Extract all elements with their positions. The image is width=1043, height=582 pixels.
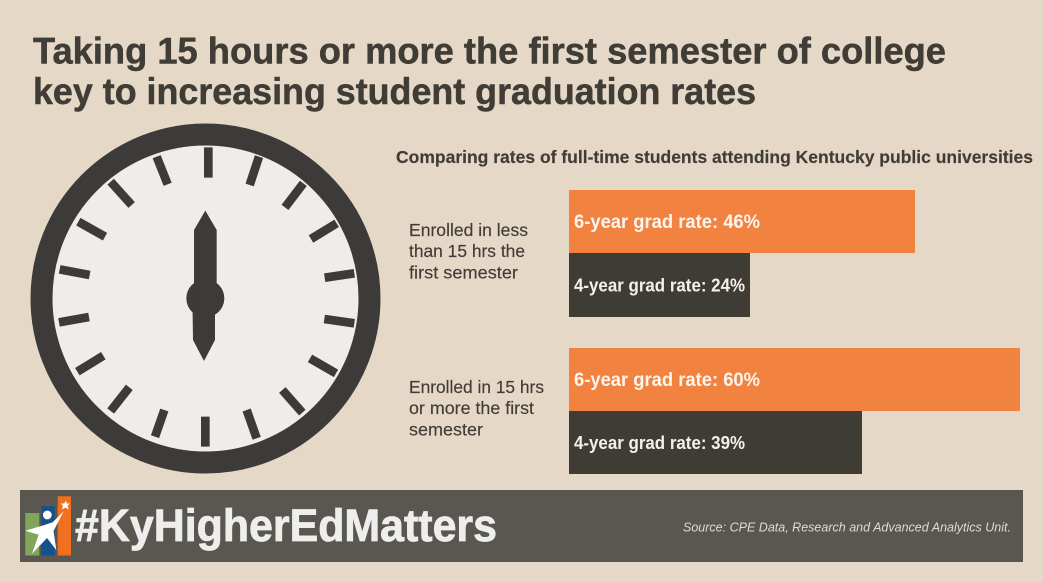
bar: 6-year rate 60%: 6-year grad rate: 60% <box>574 369 760 391</box>
icon: logo <box>25 496 71 556</box>
title <box>33 30 946 112</box>
label: less than 15 hours group: than 15 hrs the <box>409 241 525 261</box>
bar: 6-year rate 46% <box>569 190 915 253</box>
hashtag: #KyHigherEdMatters <box>75 500 497 551</box>
clock tick marks <box>59 147 354 447</box>
label: less than 15 hours group: first semester <box>409 262 518 282</box>
bar: 4-year rate 39%: 4-year grad rate: 39% <box>574 433 745 453</box>
label: less than 15 hours group <box>409 220 528 282</box>
clock hands <box>186 211 224 361</box>
title: key to increasing student graduation rates <box>33 71 756 112</box>
label: 15 hours or more group: Enrolled in 15 hrs <box>409 377 544 397</box>
bar chart: 15 hours or more <box>569 348 1020 474</box>
title: Taking 15 hours or more the first semester of college <box>33 30 946 72</box>
label: less than 15 hours group: Enrolled in less <box>409 220 528 240</box>
label: 15 hours or more group: or more the first <box>409 398 534 418</box>
label: 15 hours or more group: semester <box>409 420 483 440</box>
bar: 6-year rate 60% <box>569 348 1020 411</box>
bar chart: less than 15 hours <box>569 190 915 317</box>
label: 15 hours or more group <box>409 377 544 440</box>
icon: clock <box>42 134 370 462</box>
chart subtitle: Comparing rates of full-time students attending Kentucky public universities <box>396 147 1033 167</box>
bar: 4-year rate 24% <box>569 253 750 317</box>
source note: Source: CPE Data, Research and Advanced Analytics Unit. <box>683 520 1011 534</box>
bar: 4-year rate 39% <box>569 411 862 474</box>
bar: 4-year rate 24%: 4-year grad rate: 24% <box>574 276 745 296</box>
footer band <box>20 490 1023 562</box>
bar: 6-year rate 46%: 6-year grad rate: 46% <box>574 211 760 233</box>
